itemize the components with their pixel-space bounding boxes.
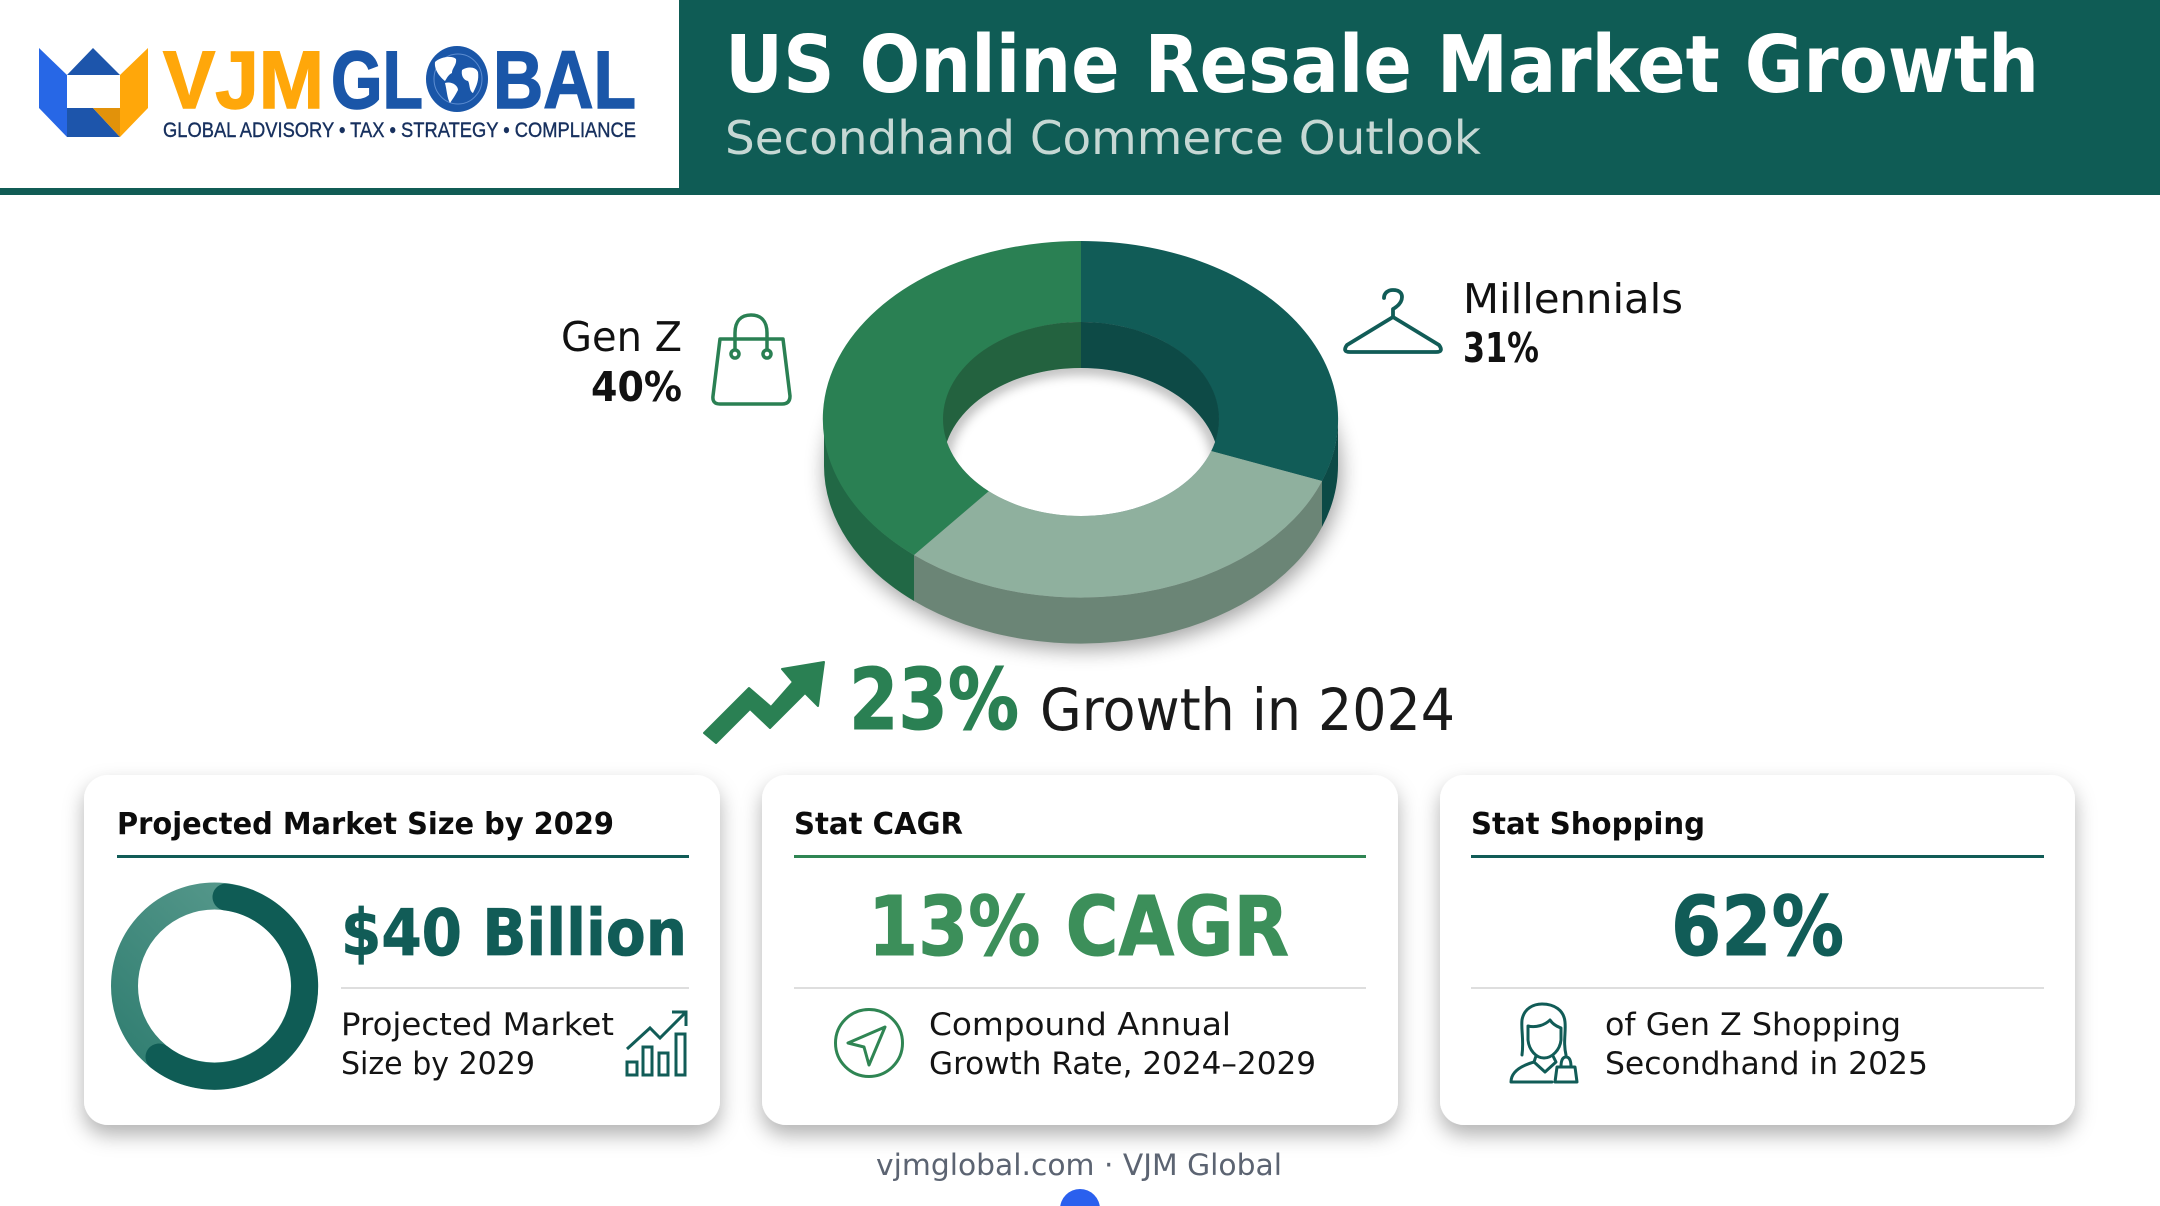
panel: CAGR — [762, 775, 1398, 1125]
icon: shopping bag — [713, 315, 790, 404]
footer text: vjmglobal.com · VJM Global — [876, 1148, 1282, 1182]
big value: 62% — [1671, 880, 1844, 975]
label: Millennials: Millennials — [1463, 275, 1683, 323]
icon: globe — [426, 46, 488, 112]
card heading: Projected Market Size by 2029 — [117, 807, 614, 842]
description: of Gen Z Shopping — [1605, 1007, 1901, 1043]
growth stat — [849, 651, 1455, 750]
big value: $40 Billion — [341, 897, 687, 971]
logo wordmark GLOBAL: O — [432, 35, 482, 126]
card heading: Stat Shopping — [1471, 807, 1705, 842]
panel: projected market size — [84, 775, 720, 1125]
description: Projected Market — [341, 1007, 614, 1043]
description — [1605, 1007, 1928, 1082]
3D donut chart — [823, 241, 1341, 650]
donut side: Millennials — [1322, 419, 1338, 527]
header logo panel — [0, 0, 679, 195]
card heading: Stat CAGR — [794, 807, 963, 842]
label: Gen Z: Gen Z — [561, 313, 682, 361]
donut segment: Millennials 31% — [1081, 241, 1338, 481]
description — [929, 1007, 1316, 1082]
donut segment: Gen Z 40% — [823, 241, 1081, 555]
subtitle: Secondhand Commerce Outlook — [725, 111, 1481, 165]
label: Gen Z: 40% — [591, 363, 682, 411]
donut inner wall and hole — [943, 322, 1219, 516]
ring chart — [124, 896, 305, 1076]
donut segment: remaining share — [914, 451, 1322, 598]
description: Compound Annual — [929, 1007, 1231, 1043]
header title panel — [679, 0, 2160, 195]
logo tagline: GLOBAL ADVISORY • TAX • STRATEGY • COMPLIANCE — [163, 118, 636, 142]
icon: clothes hanger — [1345, 290, 1441, 352]
footer blue dot — [1060, 1189, 1100, 1206]
label: Gen Z — [561, 313, 682, 411]
icon: VJM logo mark — [39, 48, 148, 137]
panel: shopping — [1440, 775, 2075, 1125]
icon: navigation arrow — [836, 1010, 902, 1076]
label: Millennials — [1463, 275, 1683, 372]
big value: 13% CAGR — [868, 880, 1289, 975]
icon: woman with shopping bag — [1511, 1004, 1577, 1082]
logo wordmark GLOBAL: GL — [331, 35, 423, 126]
logo wordmark VJM: VJM — [163, 35, 324, 126]
description: Growth Rate, 2024–2029 — [929, 1046, 1316, 1082]
description: Size by 2029 — [341, 1046, 535, 1082]
icon: bar chart with arrow — [627, 1012, 686, 1075]
donut side: other — [914, 481, 1322, 644]
icon: growth arrow — [704, 662, 824, 743]
growth stat: Growth in 2024 — [1040, 676, 1455, 744]
donut shadow — [825, 294, 1341, 650]
title: US Online Resale Market Growth — [725, 19, 2039, 111]
donut side: Gen Z — [824, 419, 914, 601]
logo wordmark GLOBAL: BAL — [493, 35, 636, 126]
growth stat: 23% — [849, 651, 1019, 750]
description: Secondhand in 2025 — [1605, 1046, 1928, 1082]
label: Millennials: 31% — [1463, 324, 1539, 372]
description — [341, 1007, 614, 1082]
